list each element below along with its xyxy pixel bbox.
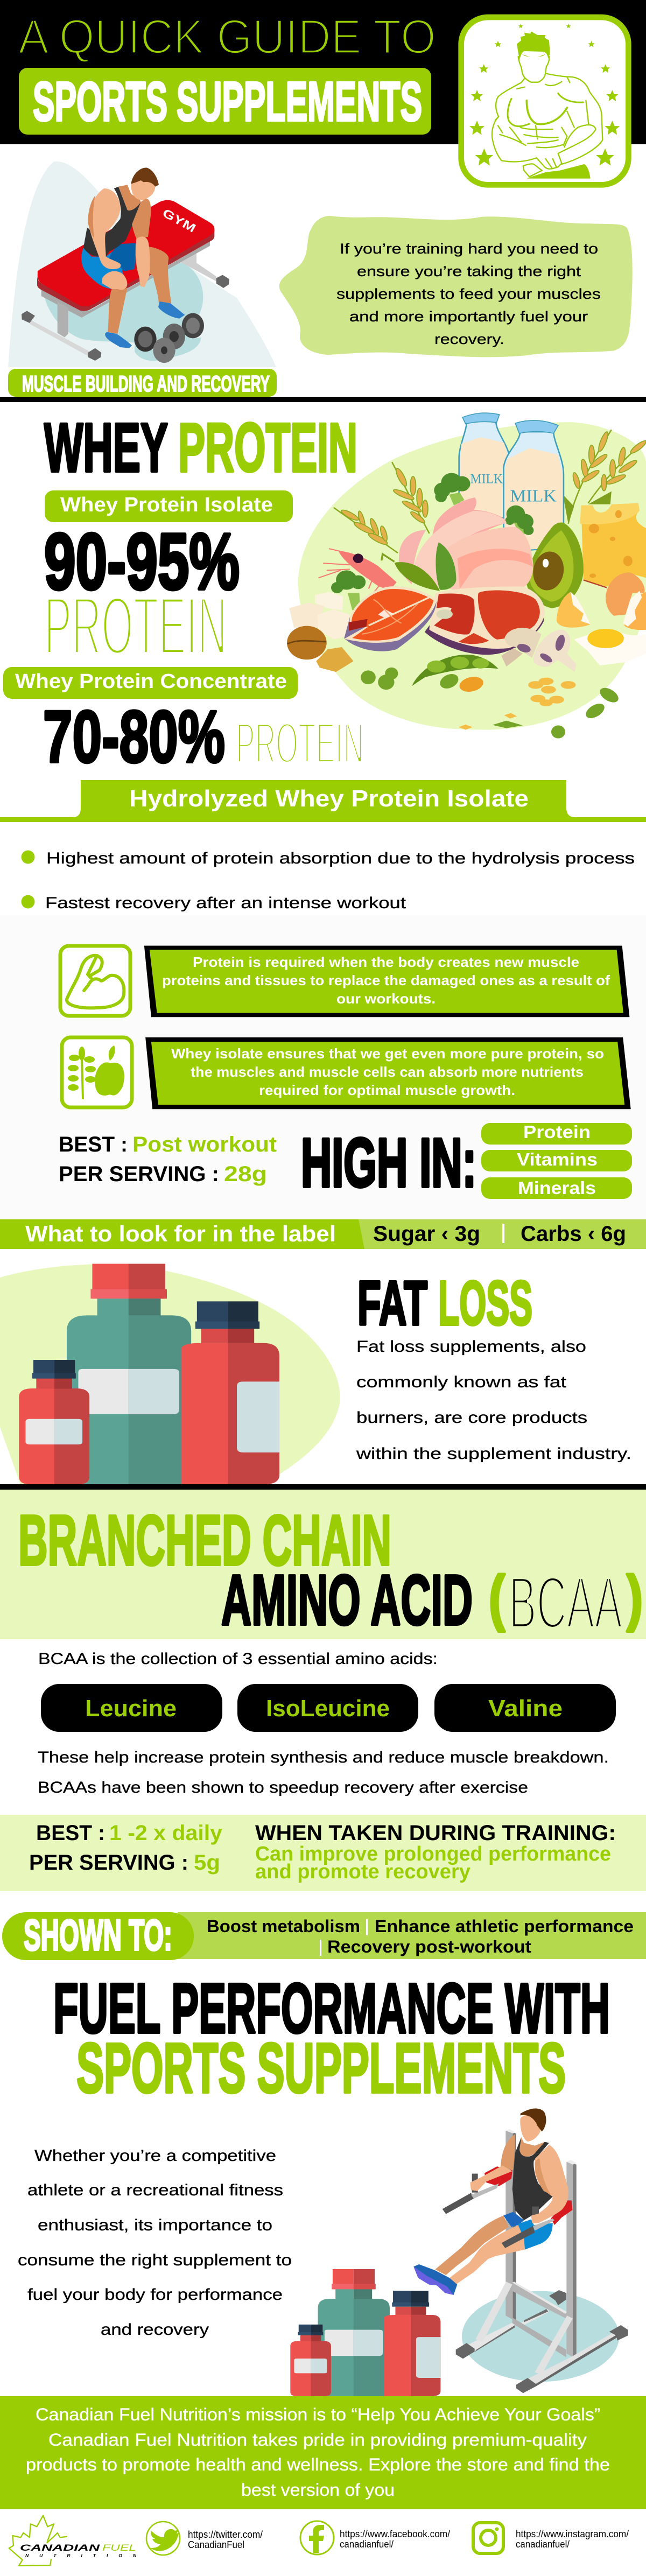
icon: muscular man badge [461, 17, 628, 185]
text: whether you're an athlete: enthusiast, its importance to [38, 2216, 272, 2234]
text box: whey isolate: the muscles and muscle cells can absorb more nutrients [191, 1064, 584, 1080]
pill: isoleucine: IsoLeucine [266, 1695, 390, 1722]
bullet: highest protein absorption: Highest amount of protein absorption due to the hydrolysis process [46, 850, 635, 867]
label: whey protein concentrate: Whey Protein Concentrate [15, 670, 287, 693]
band: dosage and training benefit: PER SERVING : [29, 1851, 188, 1875]
panel: fuel performance [18, 1968, 628, 2396]
text: whether you're an athlete: and recovery [101, 2321, 209, 2339]
text: whether you're an athlete: fuel your body for performance [27, 2286, 283, 2304]
panel: fat loss [0, 1264, 646, 1490]
chicken [399, 497, 533, 591]
panel: hydrolyzed benefits [0, 850, 646, 1249]
illustration: man seated on gym bench [8, 162, 276, 367]
stat: 70-80% protein: PROTEIN [236, 711, 364, 775]
title badge: sports supplements [19, 68, 431, 135]
pill: leucine: Leucine [85, 1695, 177, 1722]
band: dosage and training benefit: 1 -2 x daily [109, 1821, 223, 1845]
milk bottles: MILK [510, 487, 557, 506]
bar: what to look for in the label: Sugar ‹ 3g [373, 1222, 480, 1246]
icon: flexed bicep [60, 946, 130, 1016]
illustration: supplement bottles [0, 1264, 340, 1485]
text: whether you're an athlete [18, 2147, 292, 2339]
link: facebook: https://www.facebook.com/ [340, 2529, 450, 2539]
dosage: best and per serving: 28g [224, 1162, 267, 1186]
text box: protein is required: Protein is required when the body creates new muscle [193, 954, 579, 970]
illustration: man on dip station [413, 2109, 628, 2393]
title line: A quick guide to: A QUICK GUIDE TO [18, 10, 436, 64]
text: bcaa intro: BCAA is the collection of 3 essential amino acids: [38, 1650, 438, 1668]
list: high in nutrients: Protein [523, 1122, 591, 1142]
band: shown to: Enhance athletic performance [375, 1917, 634, 1936]
peas and beans [361, 655, 621, 739]
heading: bcaa abbreviation: ( [489, 1564, 505, 1632]
stat: 70-80% protein: 70-80% [43, 696, 225, 778]
band: dosage and training benefit: and promote recovery [255, 1861, 471, 1883]
text: fat loss description: within the supplement industry. [356, 1445, 631, 1463]
panel: whey protein [0, 409, 646, 822]
link: twitter [188, 2529, 263, 2550]
text: whether you're an athlete: Whether you’re a competitive [34, 2147, 276, 2165]
leaves [382, 542, 456, 591]
panel: mission statement: Canadian Fuel Nutrition takes pride in providing premium-quality [48, 2430, 587, 2449]
list: high in nutrients: Vitamins [517, 1149, 598, 1169]
text box: protein is required: proteins and tissues to replace the damaged ones as a result of [162, 972, 610, 988]
banner: hydrolyzed whey protein isolate: Hydrolyzed Whey Protein Isolate [129, 785, 529, 812]
band: dosage and training benefit [0, 1815, 646, 1891]
illustration: supplement bottles [290, 2269, 440, 2396]
band: dosage and training benefit: 5g [194, 1851, 220, 1875]
link: instagram: canadianfuel/ [516, 2539, 570, 2550]
panel: header [0, 0, 646, 185]
panel: mission statement: products to promote health and wellness. Explore the store and find the [26, 2455, 610, 2474]
heading: whey protein [44, 409, 357, 487]
tofu [289, 592, 350, 640]
stat: 90-95% protein: 90-95% [44, 517, 240, 606]
stat: 90-95% protein [44, 517, 240, 672]
steak [425, 586, 545, 655]
broccoli [331, 473, 533, 610]
band: dosage and training benefit: WHEN TAKEN DURING TRAINING: [255, 1821, 616, 1845]
text: bcaa benefits [38, 1749, 609, 1796]
label: whey protein isolate: Whey Protein Isolate [60, 494, 273, 516]
text: fat loss description [356, 1338, 631, 1463]
band: shown to: Recovery post-workout [327, 1937, 531, 1956]
icon: facebook [300, 2521, 334, 2554]
dosage: best and per serving: BEST : [59, 1133, 128, 1156]
mushrooms [501, 628, 577, 672]
illustration: man seated on gym bench: GYM [160, 206, 198, 235]
pill: valine: Valine [488, 1695, 563, 1722]
heading: whey protein: WHEY [44, 409, 168, 487]
band: shown to: Boost metabolism [207, 1917, 360, 1936]
banner: hydrolyzed whey protein isolate [0, 780, 646, 822]
avocado [526, 523, 584, 608]
text: fat loss description: burners, are core products [356, 1409, 587, 1427]
dosage: best and per serving: PER SERVING : [59, 1162, 219, 1186]
illustration: protein foods [287, 413, 646, 739]
callout: training hard blob: and more importantly fuel your [349, 308, 588, 325]
pill: leucine [41, 1684, 222, 1732]
icon: instagram [473, 2523, 503, 2553]
heading: whey protein: PROTEIN [178, 409, 357, 487]
band: shown to [2, 1911, 646, 1960]
text: fat loss description: Fat loss supplements, also [356, 1338, 586, 1356]
heading: high in: HIGH IN: [301, 1125, 476, 1202]
dosage: best and per serving [59, 1133, 277, 1186]
link: instagram: https://www.instagram.com/ [516, 2529, 629, 2539]
panel: footer [9, 2516, 629, 2566]
label: whey protein isolate [45, 490, 293, 522]
shrimp [319, 549, 397, 593]
callout: training hard blob: supplements to feed your muscles [336, 286, 601, 302]
milk bottles [459, 413, 564, 552]
band: dosage and training benefit: Can improve prolonged performance [255, 1843, 611, 1865]
text: whether you're an athlete: athlete or a recreational fitness [27, 2181, 283, 2199]
text: whether you're an athlete: consume the right supplement to [18, 2251, 292, 2269]
text: fat loss description: commonly known as fat [356, 1373, 567, 1391]
panel: mission statement [0, 2396, 646, 2509]
milk bottles: MILK [470, 471, 503, 486]
pill: valine [434, 1684, 616, 1732]
icon: wheat and apple [62, 1037, 132, 1107]
salmon [344, 586, 437, 651]
text box: whey isolate [145, 1037, 631, 1109]
panel: muscle building and recovery [0, 162, 646, 402]
bar: what to look for in the label: Carbs ‹ 6g [521, 1222, 626, 1246]
text: bcaa benefits: These help increase protein synthesis and reduce muscle breakdown. [38, 1749, 609, 1766]
band: dosage and training benefit: BEST : [36, 1821, 105, 1845]
bar: what to look for in the label [0, 1219, 646, 1249]
panel: branched chain amino acid [0, 1490, 646, 1960]
band: shown to: SHOWN TO: [24, 1911, 172, 1960]
logo: canadian fuel nutrition: NUTRITION [25, 2553, 137, 2558]
label: whey protein concentrate [3, 667, 298, 699]
logo: canadian fuel nutrition [9, 2516, 137, 2566]
list: high in nutrients: Minerals [518, 1178, 596, 1198]
walnut [287, 626, 354, 672]
logo: canadian fuel nutrition: CANADIAN [20, 2543, 100, 2553]
list: high in nutrients [481, 1122, 632, 1199]
panel: mission statement: Canadian Fuel Nutrition’s mission is to “Help You Achieve Your Goals” [36, 2405, 600, 2424]
icon: twitter [146, 2522, 180, 2555]
eggs [557, 572, 646, 665]
link: instagram [516, 2529, 629, 2550]
heading: fuel performance with sports supplements [53, 1968, 610, 2107]
link: twitter: CanadianFuel [188, 2539, 244, 2550]
heading: fat loss [357, 1268, 532, 1338]
text box: whey isolate: required for optimal muscle growth. [259, 1082, 515, 1098]
wheat stalks [334, 430, 646, 553]
callout: training hard blob: recovery. [434, 331, 504, 347]
dosage: best and per serving: Post workout [132, 1133, 277, 1156]
heading: fat loss: FAT [357, 1268, 427, 1338]
text box: whey isolate: Whey isolate ensures that we get even more pure protein, so [171, 1045, 604, 1062]
link: facebook [340, 2529, 450, 2550]
callout: training hard blob: ensure you’re taking the right [357, 263, 581, 279]
logo: canadian fuel nutrition: FUEL [102, 2543, 136, 2553]
text box: protein is required [144, 946, 629, 1017]
link: facebook: canadianfuel/ [340, 2539, 394, 2550]
pill: isoleucine [237, 1684, 418, 1732]
label: muscle building and recovery: MUSCLE BUILDING AND RECOVERY [22, 371, 270, 396]
heading: fat loss: LOSS [438, 1268, 532, 1338]
stat: 90-95% protein: PROTEIN [44, 580, 227, 672]
text box: protein is required: our workouts. [336, 991, 436, 1007]
cheese [580, 503, 646, 587]
bullet: fastest recovery: Fastest recovery after an intense workout [45, 894, 406, 912]
heading: amino acid: AMINO ACID [221, 1560, 473, 1640]
link: twitter: https://twitter.com/ [188, 2529, 263, 2540]
callout: training hard blob: If you’re training hard you need to [340, 241, 598, 257]
label: muscle building and recovery [8, 369, 277, 397]
callout: training hard blob [279, 216, 633, 357]
panel: mission statement: best version of you [241, 2480, 395, 2500]
bar: what to look for in the label: What to look for in the label [25, 1221, 336, 1246]
text: bcaa benefits: BCAAs have been shown to speedup recovery after exercise [38, 1779, 528, 1796]
